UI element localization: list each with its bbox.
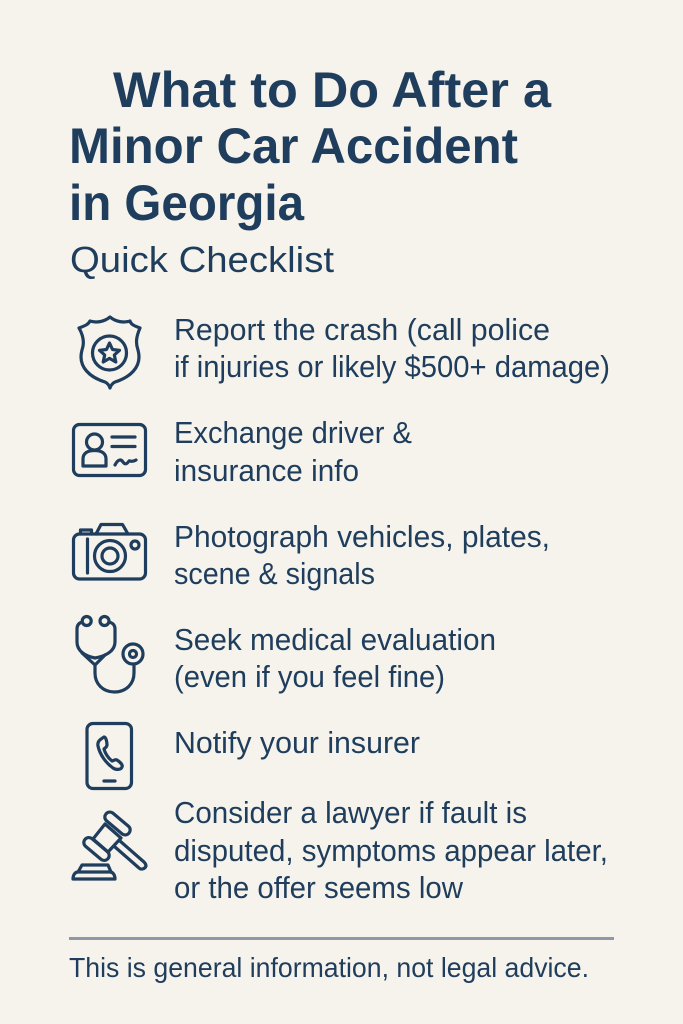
- text: medical: Seek medical evaluation: [174, 622, 496, 657]
- title: What to Do After a: [113, 62, 552, 118]
- icon: police badge: [79, 317, 140, 388]
- title: Minor Car Accident: [69, 118, 518, 174]
- text: photograph: Photograph vehicles, plates,: [174, 519, 550, 554]
- checklist item: photograph: [74, 519, 559, 591]
- text: consider a lawyer: or the offer seems low: [174, 870, 464, 905]
- text: report the crash: if injuries or likely $500+ damage): [174, 349, 610, 384]
- icon: phone: [87, 724, 132, 788]
- icon: ID card: [74, 424, 146, 476]
- disclaimer: This is general information, not legal advice.: [69, 952, 589, 983]
- text: photograph: scene & signals: [174, 556, 375, 591]
- divider line: [69, 937, 614, 940]
- text: exchange info: Exchange driver &: [174, 415, 412, 450]
- checklist item: notify insurer: [87, 724, 420, 788]
- checklist item: report the crash: [79, 312, 610, 388]
- checklist item: consider a lawyer: [73, 795, 617, 905]
- subtitle: Quick Checklist: [70, 239, 334, 280]
- icon: camera: [74, 524, 146, 579]
- text: consider a lawyer: disputed, symptoms appear later,: [174, 833, 608, 868]
- text: exchange info: insurance info: [174, 453, 359, 488]
- title: in Georgia: [69, 175, 305, 231]
- text: notify insurer: Notify your insurer: [174, 725, 420, 760]
- icon: stethoscope: [77, 616, 143, 692]
- icon: gavel: [73, 810, 146, 879]
- title: [69, 62, 552, 231]
- checklist item: medical: [77, 616, 505, 694]
- text: report the crash: Report the crash (call police: [174, 312, 550, 347]
- text: medical: (even if you feel fine): [174, 659, 445, 694]
- text: consider a lawyer: Consider a lawyer if fault is: [174, 795, 527, 830]
- checklist item: exchange info: [74, 415, 421, 488]
